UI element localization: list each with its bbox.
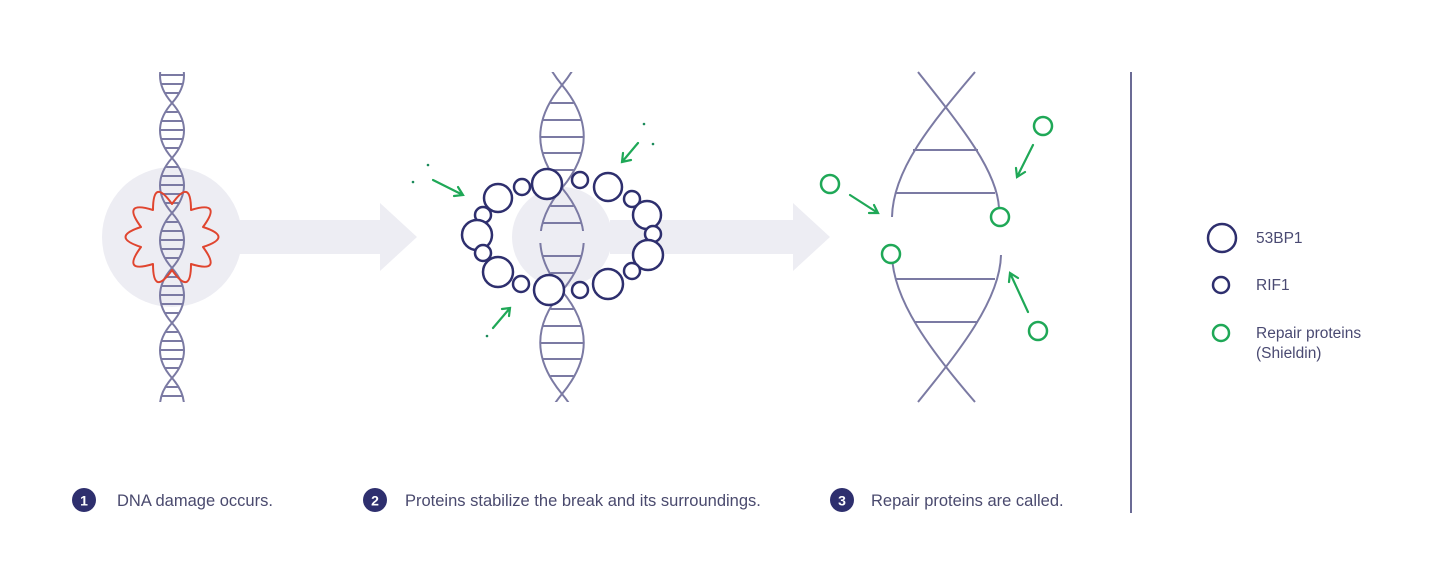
legend: RIF1 (1256, 277, 1290, 294)
legend (1208, 224, 1361, 362)
step labels (72, 488, 1064, 512)
green arrows incoming (433, 143, 638, 328)
step 2 label (363, 488, 761, 512)
step 3 label: Repair proteins are called. (871, 492, 1064, 510)
step 3 label (830, 488, 1064, 512)
arrow: step 1 to 2 (230, 203, 417, 271)
legend: Repair proteins (1256, 325, 1361, 342)
panel: step 2 proteins stabilize (412, 72, 830, 402)
step 3 label: 3 (838, 492, 846, 508)
DNA helix 2 (539, 72, 585, 402)
arrow: step 2 to 3 (610, 203, 830, 271)
panel: step 3 repair proteins called (821, 72, 1052, 402)
step 2 label: 2 (371, 492, 379, 508)
legend: (Shieldin) (1256, 345, 1321, 362)
green repair protein circles (821, 117, 1052, 340)
gray highlight circle 2 (512, 187, 612, 287)
DNA helix 1 (160, 48, 184, 433)
icon: red damage star (126, 192, 218, 282)
step 2 label: Proteins stabilize the break and its surroundings. (405, 492, 761, 510)
panel: step 1 DNA damage (102, 72, 416, 402)
divider (1130, 72, 1132, 513)
protein ring (53BP1 and RIF1) (462, 169, 663, 305)
DNA helix 3 broken (892, 72, 1001, 402)
step 1 label: 1 (80, 492, 88, 508)
legend: 53BP1 (1256, 230, 1303, 247)
green arrows to break (850, 145, 1033, 312)
step 1 label: DNA damage occurs. (117, 492, 273, 510)
gray highlight circle 1 (102, 167, 242, 307)
step 1 label (72, 488, 273, 512)
